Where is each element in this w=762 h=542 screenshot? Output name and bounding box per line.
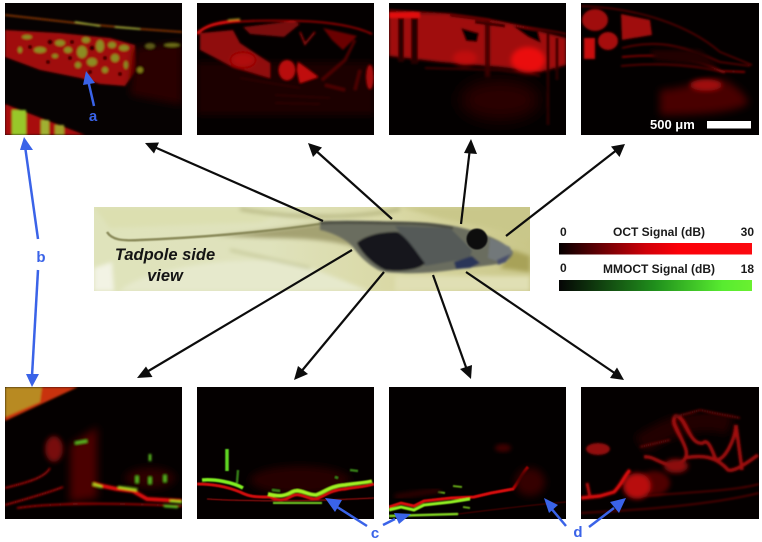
scale bar label: 500 μm [650, 117, 695, 132]
annotation d: d [573, 524, 583, 541]
annotation d [544, 498, 626, 541]
MMOCT legend labels: MMOCT Signal (dB) [603, 262, 715, 276]
arrow to top panel 3 [461, 139, 477, 224]
annotation a [83, 71, 98, 125]
arrow to bottom panel 1 [137, 250, 352, 378]
panel: bottom 4, head structures [581, 387, 759, 519]
colorbar legend: OCT and MMOCT [559, 225, 754, 291]
panel: bottom 1, tail section with wedge [4, 387, 182, 519]
tail [107, 224, 320, 240]
arrow to bottom panel 2 [294, 272, 384, 380]
arrow to top panel 2 [308, 143, 392, 219]
OCT legend labels: 0 [560, 225, 567, 239]
blue annotation arrows and labels [20, 71, 626, 542]
annotation c: c [371, 525, 379, 542]
panel: bottom 2, gut wall with green line [196, 387, 374, 519]
black arrows from tadpole to panels [137, 139, 625, 380]
panel: top 3, trunk section [388, 3, 566, 135]
annotation b: b [36, 249, 46, 266]
annotation b [20, 137, 46, 387]
photo caption [115, 246, 215, 285]
tadpole body [320, 221, 513, 273]
panel: top 1, tail section with MMOCT signal [4, 3, 182, 135]
photo caption: view [147, 267, 184, 285]
annotation a: a [89, 108, 98, 125]
arrow to top panel 4 [506, 144, 625, 236]
panel: top 4, head section with scale bar [581, 3, 759, 135]
OCT colorbar [559, 243, 752, 254]
arrow to bottom panel 4 [466, 272, 624, 380]
MMOCT legend labels: 18 [741, 262, 754, 276]
MMOCT legend labels [560, 261, 754, 276]
tail fin [215, 222, 358, 248]
arrow to bottom panel 3 [433, 275, 472, 379]
panel: bottom 3, gut wall tapering [388, 387, 566, 519]
photo: tadpole side view [94, 207, 530, 291]
OCT legend labels [560, 225, 754, 239]
panel: top 2, gut section [196, 3, 374, 135]
OCT legend labels: 30 [741, 225, 754, 239]
annotation c [325, 498, 411, 542]
MMOCT legend labels: 0 [560, 261, 567, 275]
arrow to top panel 1 [145, 142, 323, 221]
OCT legend labels: OCT Signal (dB) [613, 225, 705, 239]
scale bar [707, 121, 751, 128]
MMOCT colorbar [559, 280, 752, 291]
photo caption: Tadpole side [115, 246, 215, 264]
tadpole eye [466, 228, 488, 250]
